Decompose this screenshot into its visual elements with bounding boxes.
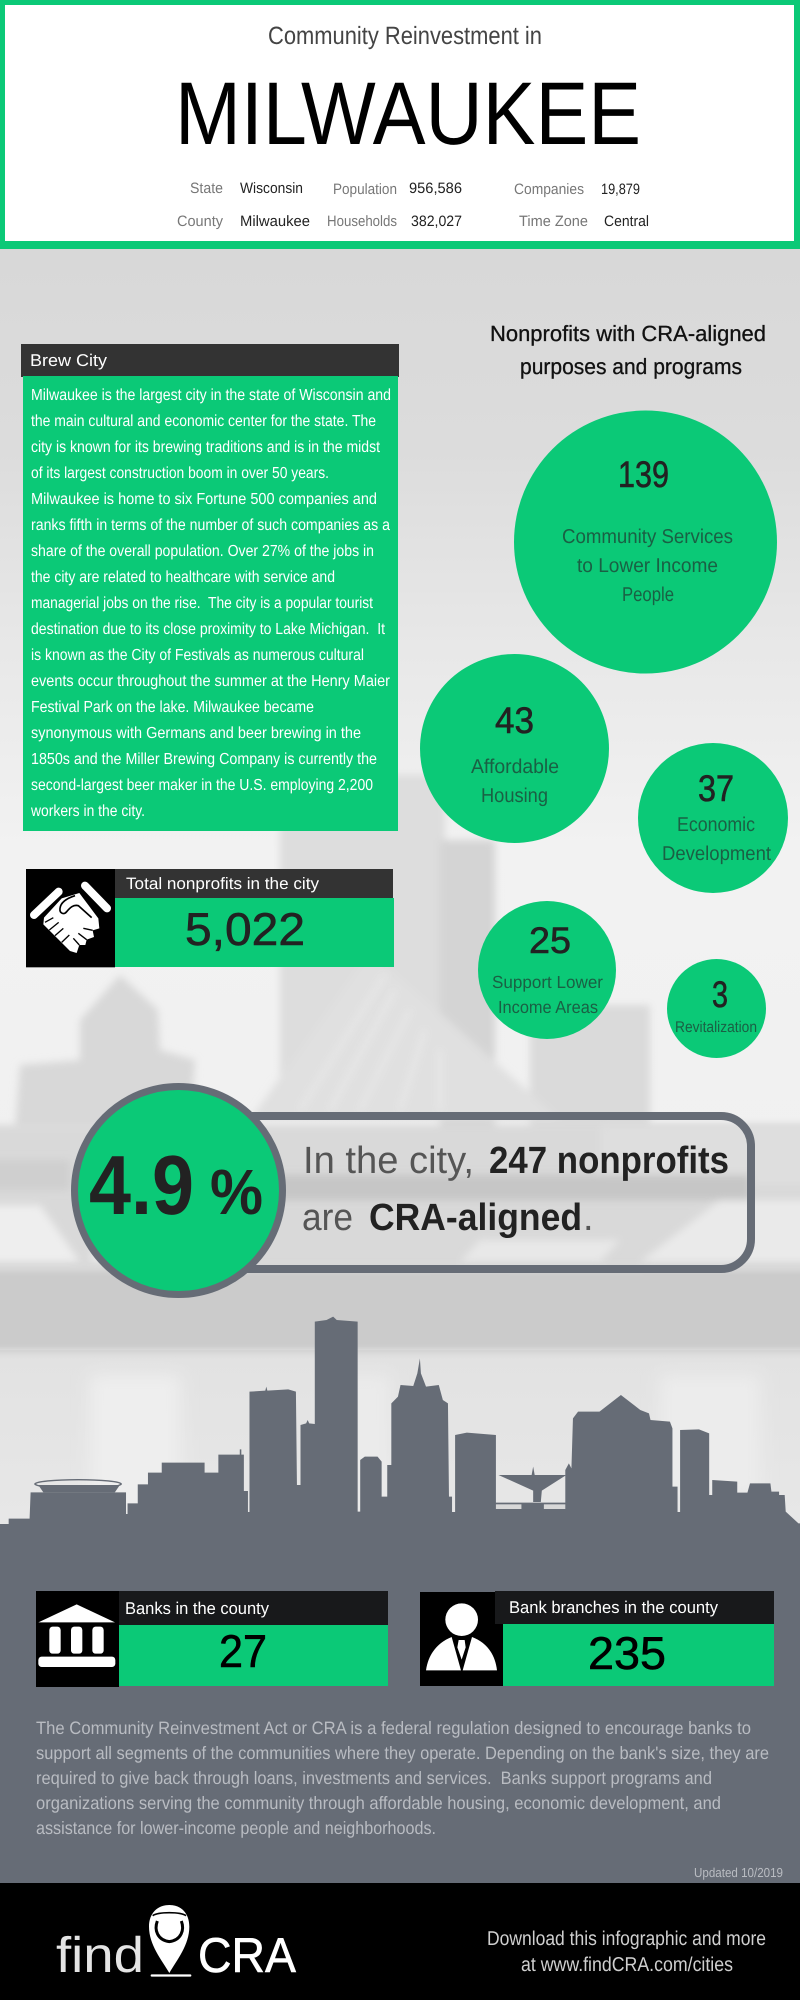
stat label: Total nonprofits in the city bbox=[126, 875, 320, 893]
bubble: Economic Development: Economic bbox=[677, 814, 755, 836]
city facts: 956,586 bbox=[409, 180, 462, 197]
footer text: Download this infographic and more bbox=[487, 1928, 766, 1950]
panel heading: Brew City bbox=[30, 351, 108, 370]
panel body text bbox=[30, 387, 391, 820]
city facts: Households bbox=[327, 213, 397, 230]
city facts: Companies bbox=[514, 181, 584, 198]
chart heading: Nonprofits with CRA-aligned bbox=[490, 321, 766, 346]
city facts: Milwaukee bbox=[240, 213, 310, 230]
city facts: Population bbox=[333, 181, 397, 198]
stat value: 235 bbox=[588, 1627, 666, 1679]
icon: map pin bbox=[149, 1905, 191, 1977]
footer bbox=[0, 1883, 800, 2000]
panel body text: city is known for its brewing traditions and is in the midst bbox=[31, 439, 380, 456]
bubble: Community Services: Community Services bbox=[562, 526, 733, 548]
update note: Updated 10/2019 bbox=[694, 1865, 783, 1880]
stat: total nonprofits bbox=[26, 869, 394, 967]
panel body text: of its largest construction boom in over 50 years. bbox=[31, 465, 329, 482]
bubble: Support Lower Income Areas: Income Areas bbox=[498, 997, 598, 1017]
callout percentage bbox=[89, 1138, 263, 1232]
stat value: 5,022 bbox=[185, 903, 305, 955]
footer text bbox=[487, 1928, 766, 1976]
city facts: County bbox=[177, 213, 223, 230]
callout circle bbox=[74, 1086, 282, 1294]
bubble: Affordable Housing bbox=[420, 654, 609, 843]
city facts: State bbox=[190, 180, 223, 197]
panel body text: synonymous with Germans and beer brewing in the bbox=[31, 725, 361, 742]
logo: findCRA: CRA bbox=[198, 1929, 296, 1983]
city facts: Wisconsin bbox=[240, 180, 303, 197]
icon: handshake bbox=[26, 869, 115, 967]
text block: CRA explanation: required to give back through loans, investments and services. Banks support programs and bbox=[36, 1768, 712, 1788]
bubble: Affordable Housing: Housing bbox=[481, 785, 548, 807]
callout text: are bbox=[302, 1197, 353, 1239]
bubble: Economic Development: Development bbox=[662, 843, 771, 865]
text block: CRA explanation: organizations serving the community through affordable housing, economic development, and bbox=[36, 1793, 721, 1813]
panel body text: Milwaukee is the largest city in the state of Wisconsin and bbox=[31, 387, 391, 404]
callout text: 247 nonprofits bbox=[489, 1140, 729, 1182]
bubble: Revitalization: Revitalization bbox=[675, 1019, 757, 1036]
stat: banks in the county bbox=[36, 1591, 388, 1687]
callout text: In the city, bbox=[303, 1140, 474, 1182]
panel body text: second-largest beer maker in the U.S. employing 2,200 bbox=[31, 777, 373, 794]
bubble: Support Lower Income Areas bbox=[478, 901, 616, 1039]
city facts: 19,879 bbox=[601, 181, 640, 198]
city facts: Central bbox=[604, 213, 649, 230]
bubble: Community Services: to Lower Income bbox=[577, 555, 718, 577]
callout text: CRA-aligned bbox=[369, 1197, 582, 1239]
logo: findCRA bbox=[56, 1905, 296, 1983]
bubble: Economic Development: 37 bbox=[698, 768, 734, 809]
callout percentage: 4.9 bbox=[89, 1138, 194, 1232]
bubble: Economic Development bbox=[638, 743, 788, 893]
panel body text: the main cultural and economic center for the state. The bbox=[31, 413, 376, 430]
text block: CRA explanation bbox=[36, 1718, 769, 1838]
panel body text: Festival Park on the lake. Milwaukee became bbox=[31, 699, 314, 716]
callout: 4.9% CRA-aligned bbox=[74, 1086, 751, 1294]
panel body text: is known as the City of Festivals as numerous cultural bbox=[31, 647, 364, 664]
city facts: Time Zone bbox=[519, 213, 588, 230]
bubble: Revitalization bbox=[667, 959, 766, 1058]
text block: CRA explanation: The Community Reinvestment Act or CRA is a federal regulation designed to encourage banks to bbox=[36, 1718, 751, 1738]
bubble: Community Services bbox=[514, 410, 777, 674]
panel body text: events occur throughout the summer at the Henry Maier bbox=[31, 673, 391, 690]
icon: bank bbox=[38, 1604, 115, 1667]
stat value: 27 bbox=[219, 1625, 267, 1677]
bubble: Community Services: People bbox=[622, 584, 674, 606]
title: MILWAUKEE bbox=[175, 63, 641, 163]
bubble: Revitalization: 3 bbox=[712, 974, 728, 1015]
bubble: Support Lower Income Areas: 25 bbox=[529, 920, 571, 961]
subtitle: Community Reinvestment in bbox=[268, 22, 542, 50]
header panel bbox=[0, 0, 800, 249]
panel: Brew City bbox=[21, 344, 399, 831]
bubble: Affordable Housing: Affordable bbox=[471, 756, 559, 778]
callout percentage: % bbox=[210, 1156, 263, 1228]
bubble: Support Lower Income Areas: Support Lower bbox=[492, 972, 603, 992]
callout text bbox=[302, 1140, 729, 1239]
callout frame bbox=[180, 1116, 751, 1269]
bubble: Community Services: 139 bbox=[618, 454, 669, 495]
icon: banker bbox=[426, 1603, 497, 1670]
chart heading bbox=[490, 321, 766, 379]
panel body text: share of the overall population. Over 27% of the jobs in bbox=[31, 543, 374, 560]
panel body text: 1850s and the Miller Brewing Company is currently the bbox=[31, 751, 377, 768]
panel body text: the city are related to healthcare with service and bbox=[31, 569, 335, 586]
callout text: . bbox=[583, 1197, 594, 1239]
chart heading: purposes and programs bbox=[520, 354, 742, 379]
background photo: blurred city skyline bbox=[0, 249, 800, 1550]
city facts bbox=[177, 180, 649, 230]
stat: bank branches in the county bbox=[420, 1591, 774, 1686]
panel body text: destination due to its close proximity to Lake Michigan. It bbox=[31, 621, 385, 638]
stat label: Banks in the county bbox=[125, 1599, 269, 1618]
panel body text: managerial jobs on the rise. The city is a popular tourist bbox=[31, 595, 373, 612]
stat label: Bank branches in the county bbox=[509, 1598, 718, 1617]
bubble: Affordable Housing: 43 bbox=[495, 700, 534, 741]
panel body text: Milwaukee is home to six Fortune 500 companies and bbox=[31, 491, 377, 508]
footer text: at www.findCRA.com/cities bbox=[521, 1954, 733, 1976]
skyline silhouette bbox=[0, 1317, 800, 1884]
logo: findCRA: find bbox=[56, 1927, 144, 1983]
panel body text: ranks fifth in terms of the number of such companies as a bbox=[31, 517, 390, 534]
panel body text: workers in the city. bbox=[30, 803, 145, 820]
text block: CRA explanation: assistance for lower-income people and neighborhoods. bbox=[36, 1818, 436, 1838]
city facts: 382,027 bbox=[411, 213, 462, 230]
